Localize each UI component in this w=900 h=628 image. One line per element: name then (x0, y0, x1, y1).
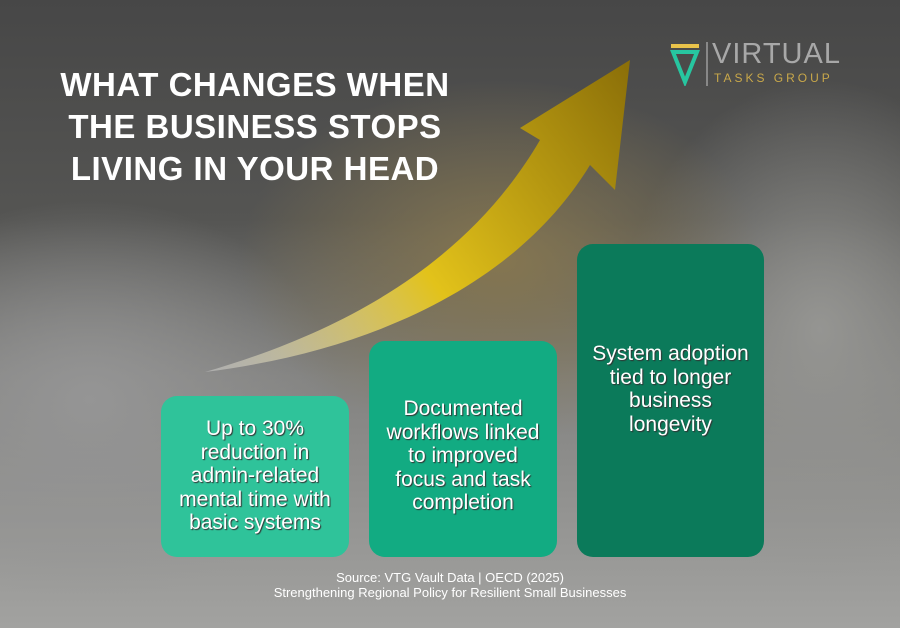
box 1: reduction in (201, 440, 309, 464)
box 3: business (629, 389, 712, 412)
box 1 (161, 396, 349, 557)
source: Strengthening Regional Policy for Resilient Small Businesses (274, 585, 626, 600)
box 2: to improved (408, 444, 518, 467)
box 3 (577, 244, 764, 557)
logo: TASKS GROUP (714, 71, 833, 85)
source (274, 570, 626, 600)
logo: VIRTUAL (712, 38, 841, 70)
box 1: Up to 30% (206, 417, 304, 440)
title: WHAT CHANGES WHEN THE BUSINESS STOPS LIVING IN YOUR HEAD (60, 66, 450, 187)
box 2 (369, 341, 557, 557)
box 2: Documented (403, 397, 523, 420)
box 2: workflows linked (387, 420, 539, 444)
box 1: admin-related (191, 464, 319, 487)
box 2: focus and task (395, 468, 531, 490)
box 3: longevity (629, 412, 712, 436)
logo (670, 38, 841, 86)
box 3: System adoption (592, 342, 749, 365)
source: Source: VTG Vault Data | OECD (2025) (336, 570, 564, 585)
box 3: tied to longer (610, 366, 731, 388)
box 1: basic systems (189, 511, 321, 534)
box 2: completion (412, 491, 514, 514)
box 1: mental time with (179, 488, 331, 510)
